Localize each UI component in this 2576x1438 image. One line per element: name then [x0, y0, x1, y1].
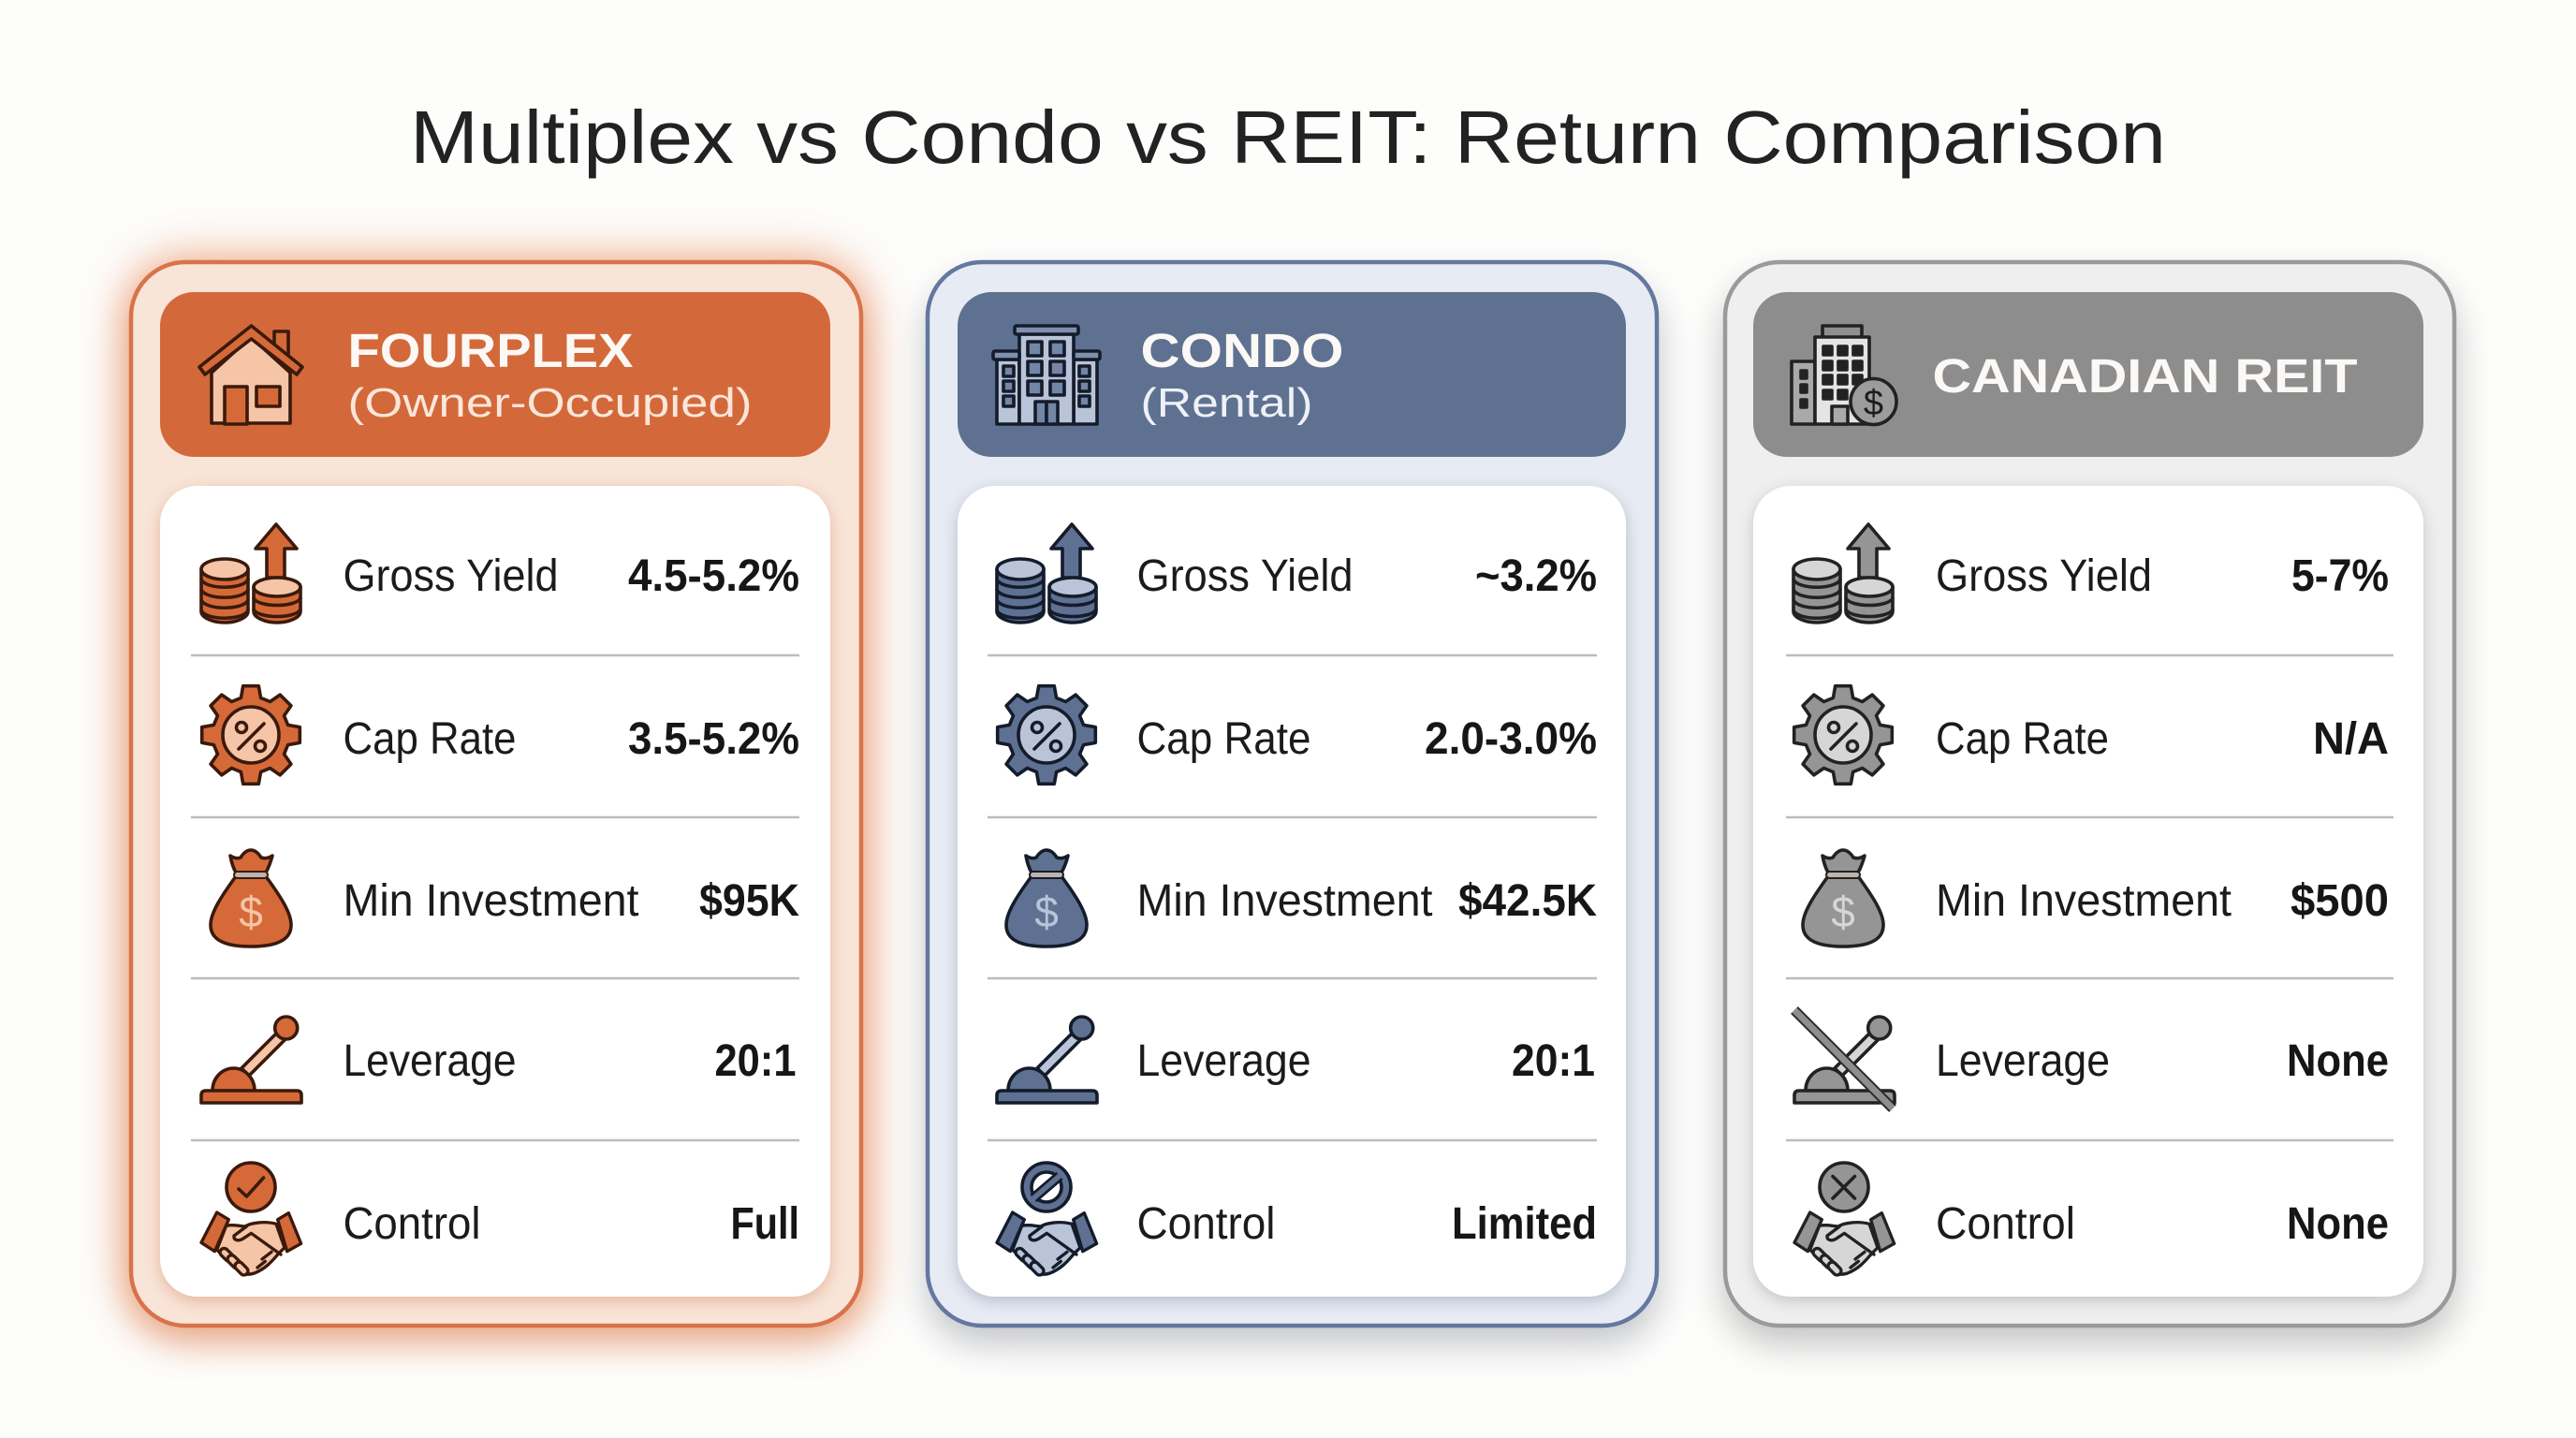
heading: canadian reit: CANADIAN REIT [1932, 349, 2357, 403]
panel: canadian reit [1723, 262, 2456, 1344]
subheading: owner-occupied: (Owner-Occupied) [348, 380, 753, 426]
row: cap rate [998, 686, 1597, 784]
row: gross yield [997, 524, 1597, 623]
row: leverage: None [2287, 1036, 2389, 1086]
row: gross yield: ~3.2% [1475, 551, 1597, 601]
row: leverage [201, 1017, 796, 1103]
icon: house [199, 326, 302, 424]
row: control [997, 1163, 1597, 1277]
icon: reit building [1792, 326, 1896, 425]
row: gross yield: 4.5-5.2% [628, 551, 799, 601]
row: cap rate: Cap Rate [1136, 714, 1310, 764]
row: gross yield: Gross Yield [1936, 551, 2152, 601]
row: cap rate: Cap Rate [1936, 714, 2109, 764]
panel: fourplex [125, 257, 867, 1341]
icon: condo building [993, 326, 1100, 424]
metrics panel: canadian reit [1753, 486, 2423, 1301]
row: min investment: Min Investment [343, 876, 638, 926]
row: control [201, 1163, 799, 1277]
row: min investment [1006, 850, 1597, 946]
row: gross yield [1793, 524, 2389, 623]
row: leverage: Leverage [1136, 1036, 1310, 1086]
row: min investment: $42.5K [1458, 876, 1597, 926]
header: fourplex [160, 292, 830, 457]
icon: reit building: $ [1864, 384, 1883, 423]
row: cap rate: Cap Rate [343, 714, 517, 764]
row: gross yield: 5-7% [2291, 551, 2389, 601]
header: canadian reit [1753, 292, 2423, 457]
heading: fourplex: FOURPLEX [348, 324, 633, 377]
row: cap rate [1794, 686, 2389, 784]
row: gross yield [201, 524, 799, 623]
row: control: Full [730, 1199, 799, 1249]
panel: condo [926, 262, 1660, 1344]
row: min investment [1803, 850, 2389, 946]
row: gross yield: Gross Yield [1136, 551, 1354, 601]
metrics panel: fourplex [160, 486, 830, 1301]
subheading: rental: (Rental) [1140, 380, 1312, 426]
row: control [1794, 1163, 2389, 1277]
metrics panel: condo [958, 486, 1626, 1301]
row: control: Limited [1452, 1199, 1597, 1249]
row: leverage [997, 1017, 1595, 1103]
row: min investment: $500 [2291, 876, 2389, 926]
heading: condo: CONDO [1140, 324, 1344, 377]
row: leverage: Leverage [343, 1036, 517, 1086]
row: control: None [2287, 1199, 2389, 1249]
row: leverage: Leverage [1936, 1036, 2110, 1086]
row: leverage: 20:1 [715, 1036, 796, 1086]
row: cap rate [202, 686, 799, 784]
row: min investment [211, 850, 799, 946]
title: Multiplex vs Condo vs REIT: Return Comparison [410, 95, 2166, 179]
row: control: Control [1136, 1199, 1275, 1249]
row: min investment: $95K [699, 876, 799, 926]
row: gross yield: Gross Yield [343, 551, 558, 601]
row: leverage [1794, 1010, 2389, 1108]
row: cap rate: 3.5-5.2% [628, 714, 799, 764]
row: control: Control [343, 1199, 481, 1249]
header: condo [958, 292, 1626, 457]
row: min investment: Min Investment [1136, 876, 1432, 926]
row: cap rate: N/A [2313, 714, 2389, 764]
row: leverage: 20:1 [1512, 1036, 1595, 1086]
row: cap rate: 2.0-3.0% [1425, 714, 1597, 764]
row: min investment: Min Investment [1936, 876, 2232, 926]
row: control: Control [1936, 1199, 2075, 1249]
